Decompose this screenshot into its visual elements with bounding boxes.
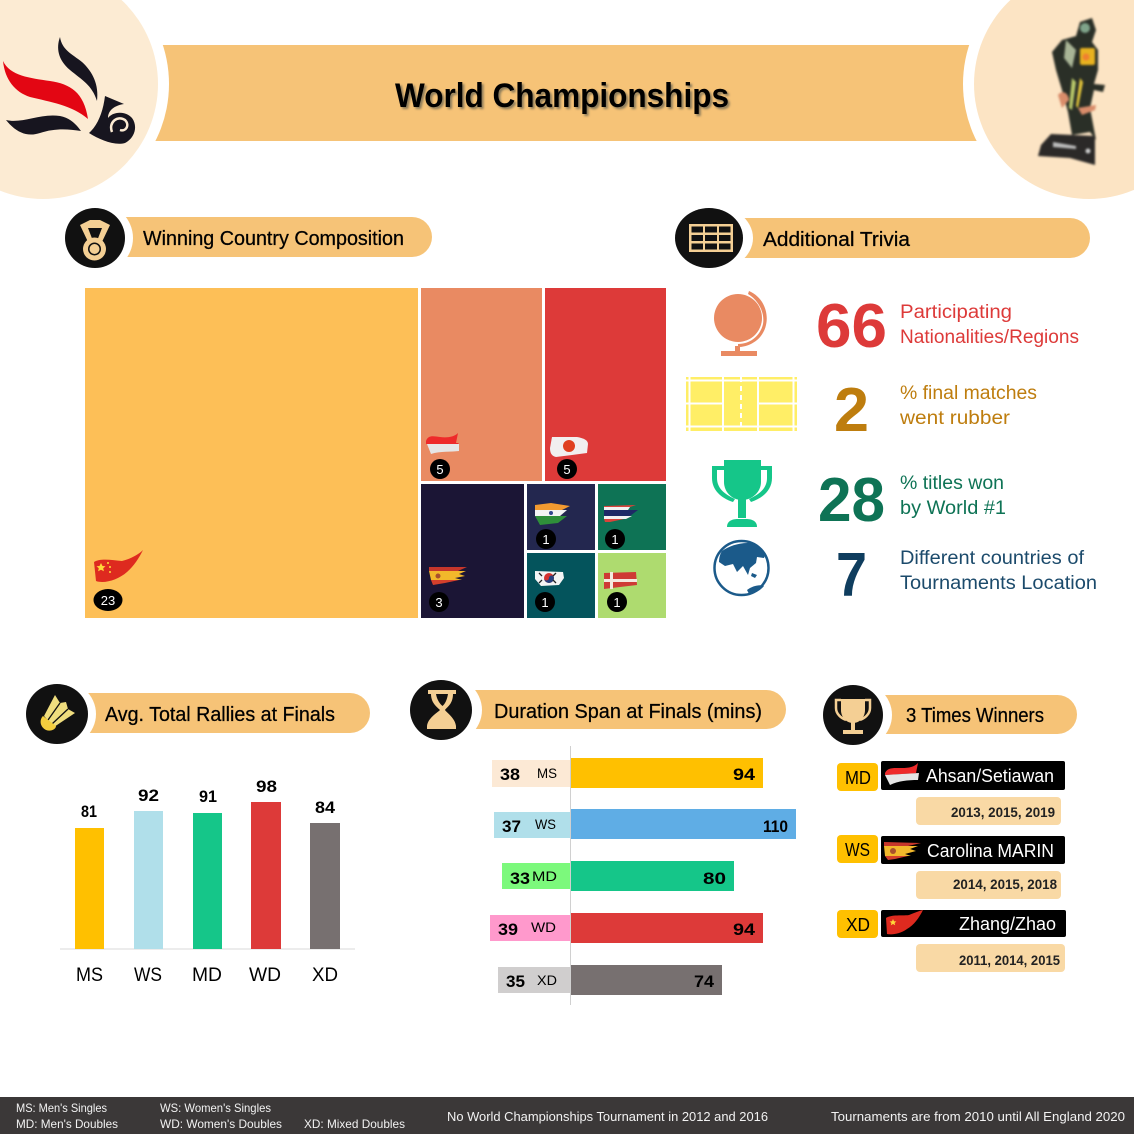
row: MS: 38: [500, 765, 520, 784]
icon: shuttlecock: [41, 695, 75, 731]
trivia: final matches: 2: [834, 376, 869, 445]
bar: XD: [310, 798, 340, 986]
icon: trophy outline: [836, 699, 870, 734]
title: World Championships: [395, 77, 729, 115]
winner: Ahsan/Setiawan: MD: [845, 768, 871, 788]
trophy statue: [1038, 18, 1105, 165]
row: WD: [490, 913, 763, 943]
trivia: titles won: [818, 466, 1006, 535]
bar chart: average total rallies: [60, 777, 355, 986]
row: WD: 94: [733, 920, 756, 939]
bar: WD: WD: [249, 965, 281, 986]
bar: WS: 92: [138, 786, 159, 805]
additional trivia panel: [686, 291, 1097, 610]
China tile: [85, 288, 418, 618]
Thailand tile: 1: [611, 532, 619, 547]
bar: MS: 81: [81, 802, 97, 821]
section header: Duration Span at Finals: Duration Span at Finals (mins): [494, 701, 762, 723]
trivia: titles won: 28: [818, 466, 885, 535]
winner: Carolina MARIN: [837, 835, 1065, 899]
row: MD: MD: [532, 868, 557, 884]
section header: Avg. Total Rallies at Finals: [18, 679, 370, 749]
section header: Avg. Total Rallies at Finals: Avg. Total Rallies at Finals: [105, 704, 335, 726]
row: MD: 80: [703, 869, 726, 888]
row: MD: 33: [510, 869, 530, 888]
row: WS: WS: [535, 816, 556, 832]
section header: Additional Trivia: Additional Trivia: [763, 229, 911, 251]
row: WS: 110: [763, 817, 788, 836]
trivia: tournament locations: [836, 541, 1097, 610]
footer: scope note: Tournaments are from 2010 until All England 2020: [831, 1109, 1125, 1124]
footer: category legend: WS: Women's Singles: [160, 1101, 271, 1115]
section header: Winning Country Composition: Winning Country Composition: [143, 228, 404, 250]
footer: note on missing years: No World Championships Tournament in 2012 and 2016: [447, 1109, 768, 1124]
winner: Ahsan/Setiawan: [837, 761, 1065, 825]
icon: badminton court: [686, 377, 797, 431]
Indonesia tile: [421, 288, 542, 481]
icon: trophy: [712, 460, 772, 527]
icon: world globe: [714, 541, 768, 595]
Denmark tile: 1: [613, 595, 621, 610]
footer: category legend: [16, 1101, 405, 1131]
India tile: 1: [542, 532, 550, 547]
bar: WD: [249, 777, 281, 986]
bar: MS: [75, 802, 104, 986]
bar: MD: [192, 787, 222, 986]
row: WD: WD: [531, 919, 556, 935]
bar: XD: 84: [315, 798, 336, 817]
Japan tile: 5: [563, 462, 571, 477]
footer: category legend: MS: Men's Singles: [16, 1101, 107, 1115]
section header: Winning Country Composition: [57, 202, 432, 274]
winner: Ahsan/Setiawan: 2013, 2015, 2019: [951, 804, 1055, 820]
winner: Zhang/Zhao: 2011, 2014, 2015: [959, 952, 1060, 968]
icon: hourglass: [427, 690, 456, 729]
Indonesia tile: 5: [436, 462, 444, 477]
section header: Additional Trivia: [665, 204, 1090, 272]
diverging bar chart: duration span: [490, 746, 796, 1005]
row: XD: 74: [694, 972, 715, 991]
winner: Carolina MARIN: WS: [845, 840, 870, 860]
winner: Zhang/Zhao: Zhang/Zhao: [959, 914, 1056, 934]
winner: Carolina MARIN: 2014, 2015, 2018: [953, 876, 1057, 892]
China tile: 23: [101, 593, 115, 608]
bar: MD: MD: [192, 965, 222, 986]
South Korea tile: 1: [541, 595, 549, 610]
icon: desk globe: [714, 291, 767, 356]
Spain tile: [421, 484, 524, 618]
section header: 3 Times Winners: [814, 680, 1077, 750]
row: XD: XD: [537, 972, 557, 988]
winner: Carolina MARIN: Carolina MARIN: [927, 841, 1054, 861]
bar: WS: WS: [134, 965, 162, 986]
winner: Zhang/Zhao: [837, 910, 1066, 972]
Spain tile: 3: [435, 595, 443, 610]
Japan tile: [545, 288, 666, 481]
winner: Zhang/Zhao: XD: [846, 915, 870, 935]
title banner: [0, 0, 1134, 210]
trivia: tournament locations: Tournaments Location: [900, 573, 1097, 594]
trivia: nationalities: Participating: [900, 302, 1012, 323]
section header: Duration Span at Finals: [400, 674, 786, 746]
trivia: nationalities: Nationalities/Regions: [900, 327, 1079, 348]
footer: category legend: MD: Men's Doubles: [16, 1117, 118, 1131]
trophy circle: [974, 0, 1134, 199]
bar: MD: 91: [199, 787, 217, 806]
row: XD: [498, 965, 722, 995]
row: WS: 37: [502, 817, 521, 836]
footer: category legend: XD: Mixed Doubles: [304, 1117, 405, 1131]
trivia: titles won: by World #1: [900, 498, 1006, 519]
list: three times winners: [837, 761, 1066, 972]
winner: Ahsan/Setiawan: Ahsan/Setiawan: [926, 766, 1054, 786]
trivia: tournament locations: Different countries of: [900, 548, 1085, 569]
trivia: final matches: [834, 376, 1037, 445]
row: XD: 35: [506, 972, 525, 991]
South Korea tile: [527, 553, 595, 618]
bar: WS: [134, 786, 163, 986]
trivia: nationalities: 66: [816, 292, 887, 361]
section header: 3 Times Winners: 3 Times Winners: [906, 705, 1044, 727]
row: WS: [494, 809, 796, 839]
bar: XD: XD: [312, 965, 338, 986]
row: MS: [492, 758, 763, 788]
treemap: winning country composition: [85, 288, 666, 618]
footer: category legend: WD: Women's Doubles: [160, 1117, 282, 1131]
trivia: final matches: went rubber: [899, 408, 1011, 429]
logo circle: [0, 0, 158, 199]
footer bar: [0, 1097, 1134, 1134]
row: WD: 39: [498, 920, 518, 939]
icon: medal: [80, 220, 110, 260]
trivia: titles won: % titles won: [900, 473, 1004, 494]
Denmark tile: [598, 553, 666, 618]
bar: WD: 98: [256, 777, 277, 796]
row: MD: [502, 861, 734, 891]
bar: MS: MS: [76, 965, 103, 986]
trivia: nationalities: [816, 292, 1079, 361]
Thailand tile: [598, 484, 666, 550]
trivia: final matches: % final matches: [900, 383, 1037, 404]
row: MS: 94: [733, 765, 756, 784]
trivia: tournament locations: 7: [836, 541, 867, 610]
India tile: [527, 484, 595, 550]
row: MS: MS: [537, 765, 557, 781]
icon: table: [689, 224, 733, 252]
